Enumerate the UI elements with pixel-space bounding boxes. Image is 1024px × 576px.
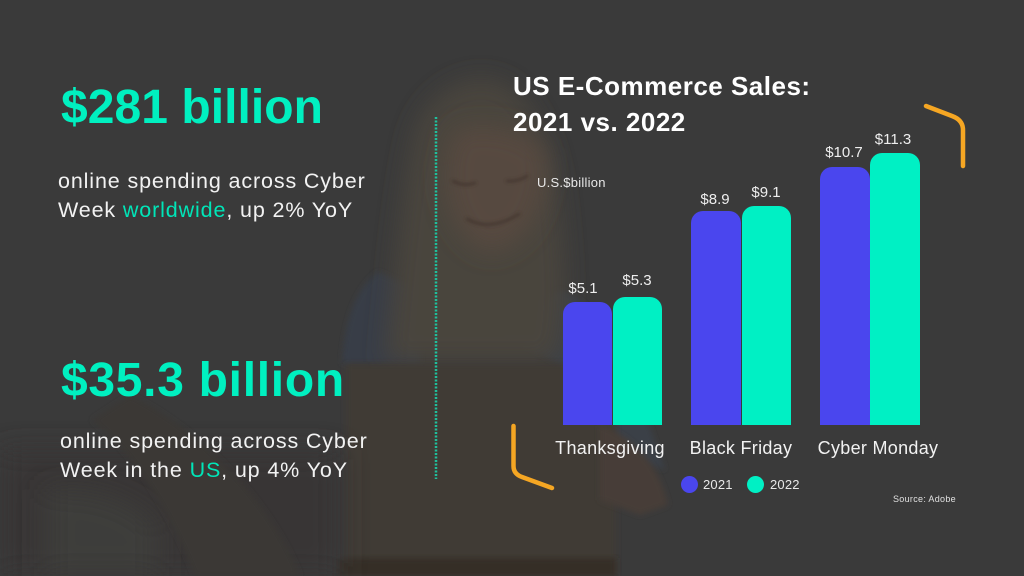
accent bracket: top right [924, 104, 966, 168]
text: US spending description: Week in the US, up 4% YoY [60, 458, 348, 482]
dotted divider [434, 117, 438, 479]
Thanksgiving bars: $5.1 [568, 280, 598, 297]
chart legend: 2021 [703, 477, 733, 492]
text: worldwide spending description: Week worldwide, up 2% YoY [58, 198, 353, 222]
chart title [513, 71, 811, 137]
parcel box, cushion and sweater [0, 364, 668, 576]
text: US spending description [60, 429, 368, 482]
Black Friday bars: $9.1 [751, 184, 781, 201]
Thanksgiving bars: Thanksgiving [555, 438, 665, 458]
sleeve and body [342, 272, 665, 470]
accent bracket: bottom left [511, 424, 554, 490]
Cyber Monday bars: $10.7 [825, 144, 863, 161]
eyes and smile [453, 176, 527, 224]
Cyber Monday bars: $11.3 [875, 131, 911, 148]
Black Friday bars [690, 184, 792, 458]
text: worldwide spending description [58, 169, 366, 222]
Thanksgiving bars: $5.3 [622, 272, 652, 289]
chart title: US E-Commerce Sales: [513, 71, 811, 101]
text: worldwide spending description: online spending across Cyber [58, 169, 366, 193]
Black Friday bars: Black Friday [690, 438, 792, 458]
Thanksgiving bars [555, 272, 665, 458]
Cyber Monday bars: Cyber Monday [818, 438, 938, 458]
chart legend: 2022 [770, 477, 800, 492]
stat: US spending figure: $35.3 billion [61, 354, 345, 407]
Cyber Monday bars [818, 131, 938, 458]
chart title: 2021 vs. 2022 [513, 107, 686, 137]
source note: Source: Adobe [893, 494, 956, 504]
Black Friday bars: $8.9 [700, 191, 730, 208]
face [445, 126, 547, 252]
chart legend [681, 476, 800, 493]
stat: worldwide spending figure: $281 billion [61, 81, 323, 134]
hair [385, 79, 565, 362]
chart unit label: U.S.$billion [537, 175, 606, 190]
text: US spending description: online spending across Cyber [60, 429, 368, 453]
